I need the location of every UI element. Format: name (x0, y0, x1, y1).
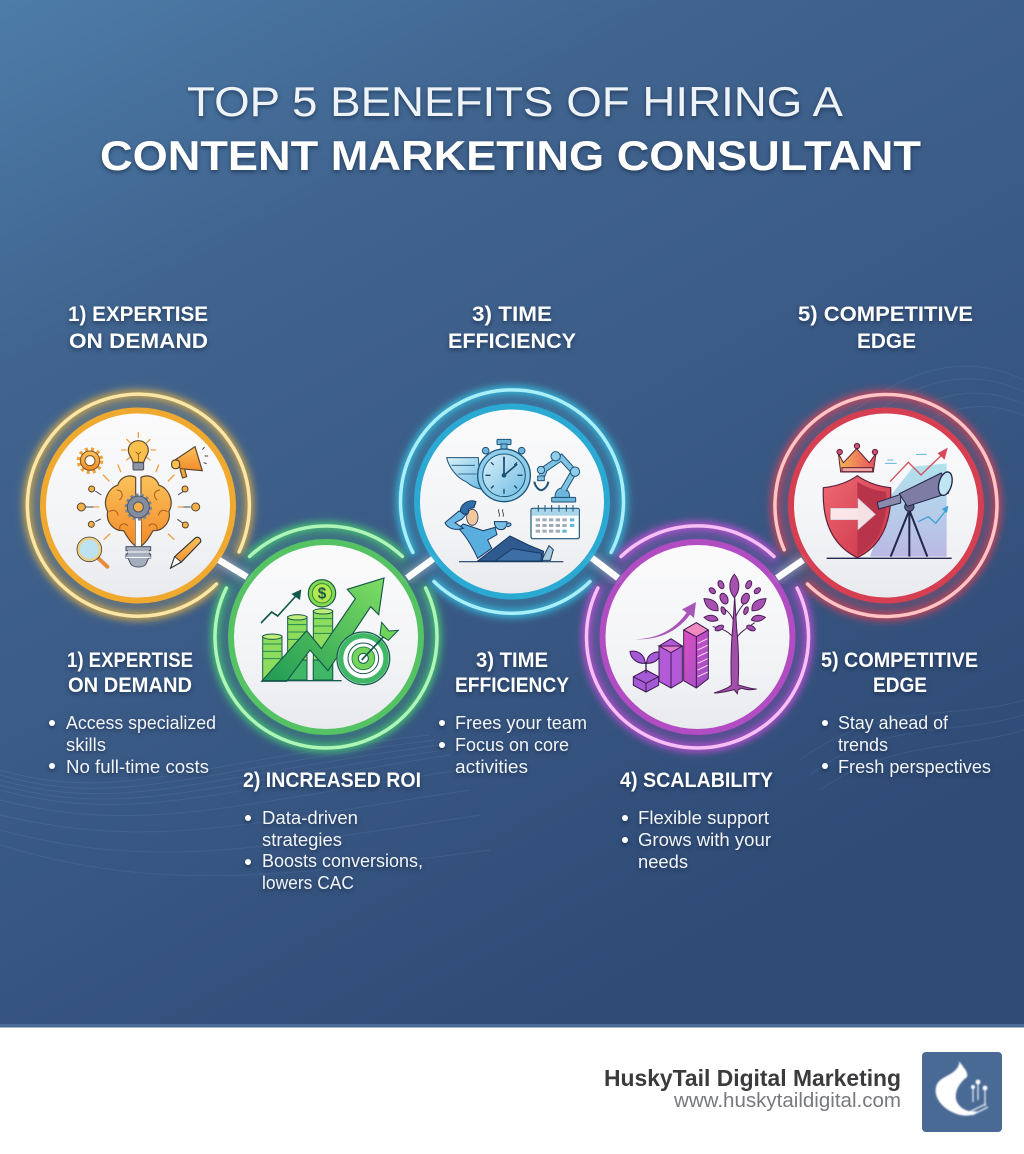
heading 4: 4) SCALABILITY (620, 769, 773, 792)
panel: competitive edge (775, 303, 997, 777)
heading above circle 3: 3) TIME (472, 303, 552, 326)
heading below circle 5: EDGE (873, 674, 927, 697)
heading 2: 2) INCREASED ROI (243, 769, 421, 792)
icon: shield, crown and telescope (823, 443, 955, 558)
title (100, 78, 921, 179)
heading below circle 1: 1) EXPERTISE (67, 649, 193, 672)
connector lines (219, 558, 803, 578)
circle 5 rings (775, 394, 997, 616)
bullet list 3 (439, 712, 587, 777)
heading below circle 1 (67, 649, 193, 697)
heading below circle 5: 5) COMPETITIVE (821, 649, 978, 672)
title line 2: CONTENT MARKETING CONSULTANT (100, 132, 921, 179)
heading above circle 3: EFFICIENCY (448, 330, 576, 353)
panel: scalability (586, 526, 809, 872)
bullet list 2: Data-driven (262, 807, 358, 828)
bullet list 3: Frees your team (455, 712, 587, 733)
bullet list 4: Flexible support (638, 807, 769, 828)
bullet list 2 (245, 807, 423, 893)
bullet list 3: activities (455, 756, 528, 777)
heading below circle 3: 3) TIME (476, 649, 548, 672)
heading below circle 3 (455, 649, 569, 697)
bullet list 1: No full-time costs (66, 756, 209, 777)
heading above circle 3 (448, 303, 576, 353)
icon: brain bulb (77, 433, 208, 568)
bullet list 5: Stay ahead of (838, 712, 949, 733)
heading above circle 5: EDGE (857, 330, 916, 353)
icon: stopwatch, robot arm, relaxed person, calendar (445, 439, 580, 562)
footer url: www.huskytaildigital.com (673, 1090, 901, 1112)
panel: expertise on demand (27, 303, 249, 777)
heading below circle 5 (821, 649, 978, 697)
bullet list 5 (822, 712, 991, 777)
logo (922, 1052, 1002, 1132)
footer brand name: HuskyTail Digital Marketing (604, 1065, 901, 1091)
circle 3 rings (400, 390, 624, 613)
bullet list 4 (622, 807, 771, 872)
bullet list 2: Boosts conversions, (262, 850, 423, 871)
bullet list 1: skills (66, 734, 106, 755)
bullet list 5: trends (838, 734, 888, 755)
heading above circle 5 (798, 303, 973, 353)
heading above circle 1: 1) EXPERTISE (68, 303, 208, 326)
icon: growth chart and target: $ (318, 586, 327, 603)
heading above circle 5: 5) COMPETITIVE (798, 303, 973, 326)
panel: time efficiency (400, 303, 624, 777)
circle 1 rings (27, 394, 249, 616)
bullet list 2: lowers CAC (262, 872, 354, 893)
bullet list 4: Grows with your (638, 829, 771, 850)
bullet list 2: strategies (262, 829, 342, 850)
heading below circle 1: ON DEMAND (68, 674, 192, 697)
circle 4 rings (586, 526, 809, 748)
heading below circle 3: EFFICIENCY (455, 674, 569, 697)
bullet list 1 (49, 712, 216, 777)
circle 2 rings (215, 526, 437, 748)
heading above circle 1: ON DEMAND (69, 330, 208, 353)
title line 1: TOP 5 BENEFITS OF HIRING A (187, 78, 843, 125)
bullet list 4: needs (638, 851, 688, 872)
panel: increased roi (215, 526, 437, 893)
bullet list 1: Access specialized (66, 712, 216, 733)
bullet list 3: Focus on core (455, 734, 569, 755)
heading above circle 1 (68, 303, 208, 353)
bullet list 5: Fresh perspectives (838, 756, 991, 777)
background wave lines (0, 366, 1024, 876)
icon: bars, sprout and tree (630, 574, 766, 694)
icon: growth chart and target (261, 578, 398, 685)
footer (0, 1024, 1024, 1154)
